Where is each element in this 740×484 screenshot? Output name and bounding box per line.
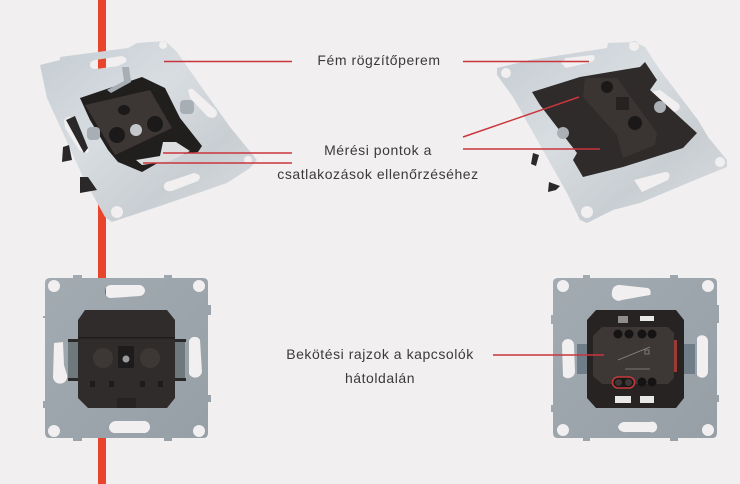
metal mounting plate <box>40 41 257 222</box>
line: measuring point right upper <box>463 97 579 137</box>
label: measuring points: Mérési pontok a <box>324 142 432 158</box>
device: socket mechanism, angled view <box>40 41 257 222</box>
device: switch mechanism, angled view <box>497 41 727 223</box>
rotary terminals <box>93 348 160 368</box>
rear housing <box>78 310 175 408</box>
label: measuring points: csatlakozások ellenőrzéséhez <box>277 166 479 182</box>
metal mounting plate <box>43 275 211 441</box>
label: wiring diagrams: hátoldalán <box>345 370 415 386</box>
clips under plate <box>62 116 97 193</box>
side clamps <box>68 342 185 378</box>
line: flange right <box>463 60 589 62</box>
socket face <box>85 90 172 155</box>
label: measuring points <box>277 142 479 182</box>
inner terminal panel <box>593 327 674 384</box>
rear housing <box>587 310 684 408</box>
line: wiring diagram <box>493 354 604 356</box>
metal mounting plate <box>551 275 719 441</box>
voltage marking <box>674 340 677 372</box>
upper terminal holes <box>614 330 656 386</box>
white release tabs <box>615 316 654 403</box>
terminal holes <box>601 81 642 130</box>
line: measuring point left lower <box>143 162 292 164</box>
wiring diagram markings <box>618 347 650 369</box>
line: measuring point right lower <box>463 148 600 150</box>
clips under plate <box>531 153 560 192</box>
callout lines <box>143 62 604 355</box>
line: measuring point left upper <box>163 152 292 154</box>
line: flange left <box>164 60 292 62</box>
label: wiring diagrams: Bekötési rajzok a kapcsolók <box>286 346 474 362</box>
clamp bars <box>68 339 186 381</box>
metal mounting plate <box>497 41 727 223</box>
switch rear housing <box>532 62 697 177</box>
front terminal windows <box>90 381 163 408</box>
red cable strip <box>98 0 106 484</box>
label: wiring diagrams <box>286 346 474 386</box>
centre screw <box>118 346 134 368</box>
device: switch mechanism, rear view <box>551 275 719 441</box>
side clamps <box>577 344 695 374</box>
rear housing seam <box>78 337 175 338</box>
side clamps <box>87 67 194 165</box>
socket holes <box>109 105 163 143</box>
side screws <box>557 101 666 139</box>
device: socket mechanism, rear view <box>43 275 211 441</box>
raised terminal block <box>583 78 657 158</box>
socket housing <box>80 77 202 172</box>
red highlighted terminal ring <box>612 377 634 388</box>
centre screw <box>130 124 142 136</box>
label: metal flange: Fém rögzítőperem <box>317 52 441 68</box>
